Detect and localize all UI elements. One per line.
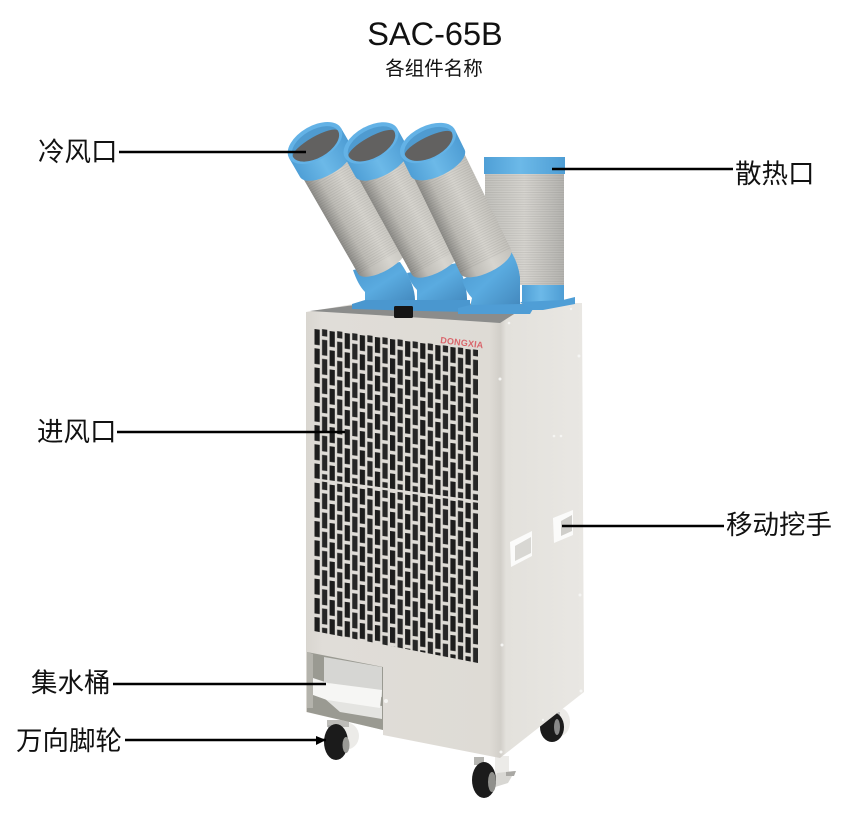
title: SAC-65B bbox=[367, 16, 503, 52]
rear caster bbox=[540, 708, 570, 742]
label: water tank: 集水桶 bbox=[31, 668, 110, 698]
cabinet top bbox=[310, 304, 530, 323]
cold air duct 2 bbox=[337, 114, 468, 285]
right carry handle bbox=[553, 510, 573, 543]
label: casters: 万向脚轮 bbox=[16, 726, 122, 756]
duct mounting plates bbox=[352, 297, 575, 312]
label: casters bbox=[16, 726, 326, 756]
label: air inlet: 进风口 bbox=[37, 417, 116, 447]
subtitle: 各组件名称 bbox=[385, 58, 483, 80]
latch bbox=[394, 306, 413, 318]
brand logo: DONGXIA bbox=[440, 335, 484, 350]
water tank compartment bbox=[307, 652, 383, 730]
label: heat outlet: 散热口 bbox=[735, 159, 814, 189]
air conditioner unit bbox=[281, 113, 584, 798]
left duct elbow bbox=[353, 262, 415, 303]
middle duct elbow bbox=[407, 263, 467, 304]
label: carry handle: 移动挖手 bbox=[726, 510, 832, 540]
cold air duct 1 bbox=[281, 113, 414, 284]
cold air duct 3 elbow bbox=[462, 250, 520, 307]
cabinet body bbox=[306, 303, 584, 758]
label: cold air outlet: 冷风口 bbox=[38, 137, 118, 167]
rear exhaust duct bbox=[484, 157, 565, 303]
front right caster bbox=[472, 756, 516, 798]
screws bbox=[384, 308, 582, 754]
front left caster bbox=[324, 720, 359, 760]
water tank handle bbox=[313, 678, 382, 708]
grille bbox=[312, 328, 480, 664]
cold air duct 3 plate bbox=[458, 304, 533, 314]
left carry handle bbox=[510, 531, 532, 567]
cold air duct 3 bbox=[394, 115, 518, 285]
